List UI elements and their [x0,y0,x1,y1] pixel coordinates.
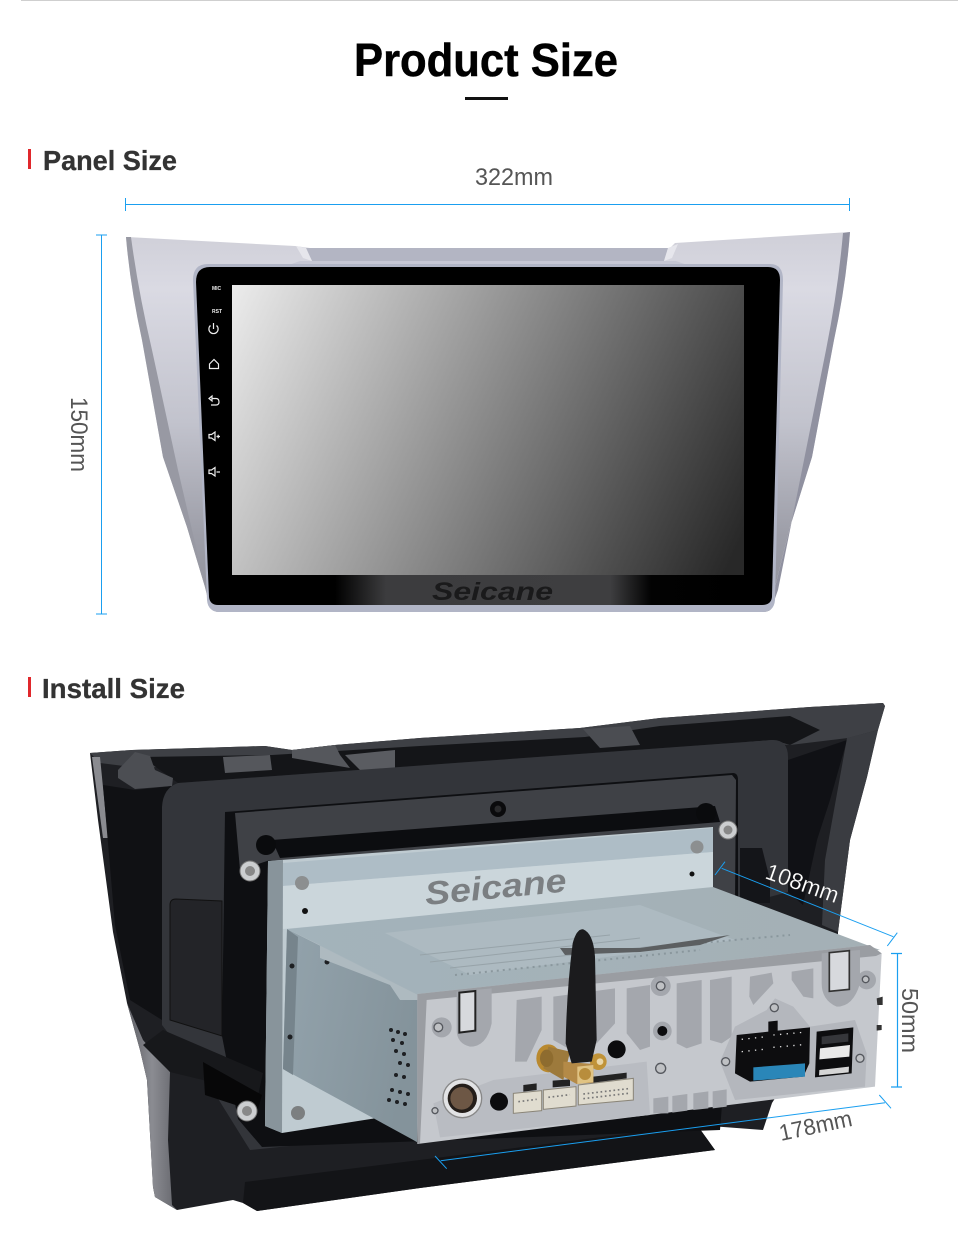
inner mounting plate [162,740,788,1150]
bottom tabs [653,1089,727,1113]
black bezel [196,267,780,605]
screen [232,285,744,575]
logo on chin: Seicane [432,578,553,606]
icon: volume down [209,468,220,476]
fascia right edge shading [772,232,850,607]
icon: power [209,323,218,334]
top label [385,905,735,975]
plate clips [459,991,475,1033]
dimension: depth 108mm: 108mm [762,858,843,908]
icon: back [209,396,219,405]
product: radio unit rear view [90,703,885,1211]
dimension: height 50mm: 50mm [897,988,923,1053]
box side [283,929,420,1142]
dimension: panel width 322mm [126,164,850,211]
box side vent holes [288,960,410,1106]
icon: volume up [209,432,220,440]
dimension: depth 108mm [715,858,897,946]
top vents [455,935,790,975]
mount holes [256,835,276,855]
harness connector [735,1021,810,1082]
left clip [118,752,173,789]
dimension: height 50mm [891,953,923,1087]
connector tops [523,1073,627,1092]
top divider line [21,0,958,1]
stain [560,935,730,955]
slot line [272,806,720,858]
title underline [465,97,508,100]
bottom flange [243,1125,715,1211]
left interior [103,785,172,1020]
mount hole top [490,801,506,817]
fascia centre band [306,248,668,261]
jack socket [443,1079,482,1118]
right outer band [822,730,878,932]
holes [490,1026,667,1111]
bezel rim [193,264,783,612]
connector recess [720,998,867,1100]
side buttons: RST [212,309,222,315]
right tab [740,848,770,903]
lower recess [433,1062,650,1137]
antenna [566,929,597,1063]
unit back panel [265,827,713,1142]
rear frame [90,703,885,1211]
white connectors [513,1078,633,1113]
plate screws [432,976,869,1114]
product: radio panel front [126,232,850,612]
dimension: width 178mm [435,1095,891,1169]
left grey strip [127,1003,177,1210]
brand logo on unit: Seicane [423,862,568,912]
left lip [92,757,108,838]
frame clip recess [223,755,272,773]
black clip arm [143,1030,263,1100]
box top [287,887,880,996]
dimension: width 178mm: 178mm [777,1105,854,1146]
recess plate [235,775,736,905]
black recess [222,773,738,1147]
side buttons [209,286,222,476]
mount screws [237,821,737,1121]
side tab [170,899,222,1036]
heading: Panel Size: Panel Size [43,145,177,176]
silver fascia [126,232,850,612]
dimension: panel width 322mm: 322mm [475,164,553,191]
fascia left edge shading [126,237,210,607]
frame dark band [142,716,820,783]
dimension: panel height 150mm [65,235,107,614]
gold antenna connector [536,1044,607,1084]
frame top strip [90,703,885,768]
icon: home [210,360,218,368]
USB ports [815,1027,853,1077]
bezel chin [233,575,743,605]
dimension: panel height 150mm: 150mm [65,397,92,472]
plate recesses [432,950,876,1062]
right interior [788,740,847,905]
side buttons: MIC [212,286,222,292]
heading: Install Size: Install Size [42,673,185,704]
title: Product Size [354,34,618,86]
dark panel edge under plate [877,997,883,1031]
box rear plate [417,945,882,1144]
screws on back panel [291,840,704,1120]
